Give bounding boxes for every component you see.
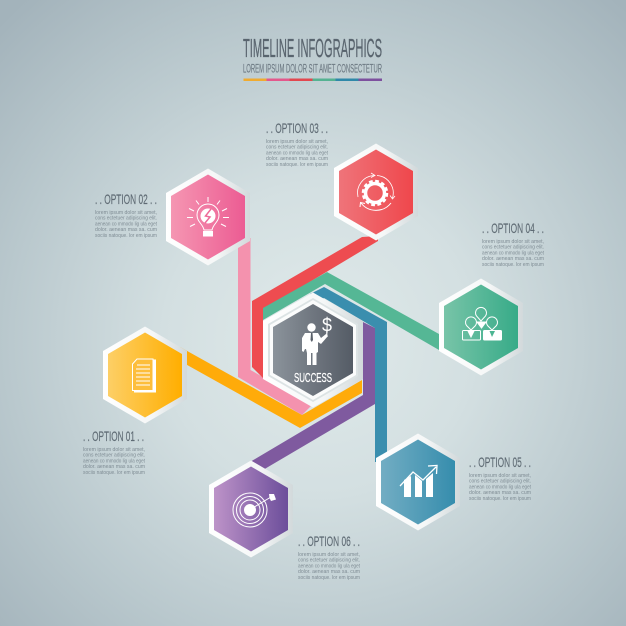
text block: option 04	[482, 220, 544, 268]
text block: option 04: cons ectetuer adipiscing elit.	[482, 245, 544, 251]
text block: option 06: aenean co mmodo lig ula eget	[298, 563, 360, 569]
text block: option 01: lorem ipsum dolor sit amet,	[83, 447, 145, 453]
text block: option 02	[95, 191, 157, 239]
text block: option 06: lorem ipsum dolor sit amet,	[298, 552, 360, 558]
text block: option 03	[266, 120, 328, 168]
text block: option 02: . . OPTION 02 . .	[95, 191, 157, 207]
icon: document	[132, 359, 156, 392]
text block: option 06: sociis natoque. lor em ipsum	[298, 575, 360, 581]
text block: option 03: lorem ipsum dolor sit amet,	[266, 139, 328, 145]
text block: option 05: . . OPTION 05 . .	[469, 454, 531, 470]
icon: lightbulb	[187, 197, 229, 236]
text block: option 02: aenean co mmodo lig ula eget	[95, 221, 157, 227]
hexagon: option 01 document	[103, 326, 187, 424]
icon: businessman with dollar: $	[322, 316, 332, 336]
text block: option 01	[83, 428, 145, 476]
text block: option 01: sociis natoque. lor em ipsum	[83, 470, 145, 476]
hexagon: option 02 lightbulb	[166, 168, 250, 266]
ribbon: green	[263, 272, 439, 350]
text block: option 02: dolor. aenean mas sa. cum	[95, 227, 157, 233]
text block: option 02: sociis natoque. lor em ipsum	[95, 233, 157, 239]
text block: option 04: lorem ipsum dolor sit amet,	[482, 239, 544, 245]
icon: growth chart	[400, 466, 437, 497]
text block: option 01: dolor. aenean mas sa. cum	[83, 464, 145, 470]
text block: option 03: aenean co mmodo lig ula eget	[266, 150, 328, 156]
text block: option 06	[298, 533, 360, 581]
text block: option 04: sociis natoque. lor em ipsum	[482, 262, 544, 268]
rainbow rule	[244, 78, 382, 81]
text block: option 05: sociis natoque. lor em ipsum	[469, 496, 531, 502]
ribbon: red	[252, 236, 378, 378]
icon: target and arrow	[233, 493, 276, 527]
hexagon: option 04 team	[439, 278, 523, 376]
text block: option 06: cons ectetuer adipiscing elit.	[298, 558, 360, 564]
text block: option 02: cons ectetuer adipiscing elit.	[95, 216, 157, 222]
hexagon: option 06 target	[209, 460, 293, 558]
text block: option 01: . . OPTION 01 . .	[83, 428, 144, 444]
text block: option 03: sociis natoque. lor em ipsum	[266, 162, 328, 168]
text block: option 04: dolor. aenean mas sa. cum	[482, 256, 544, 262]
text block: option 05	[469, 454, 531, 502]
text block: option 06: dolor. aenean mas sa. cum	[298, 569, 360, 575]
text block: option 01: aenean co mmodo lig ula eget	[83, 458, 145, 464]
hexagon: option 05 chart	[376, 434, 460, 530]
hexagon: option 03 gear	[334, 144, 418, 240]
text block: option 03: cons ectetuer adipiscing elit.	[266, 145, 328, 151]
text block: option 01: cons ectetuer adipiscing elit.	[83, 453, 145, 459]
text block: option 03: . . OPTION 03 . .	[266, 120, 328, 136]
text block: option 03: dolor. aenean mas sa. cum	[266, 156, 328, 162]
text block: option 02: lorem ipsum dolor sit amet,	[95, 210, 157, 216]
ribbon: purple	[250, 322, 375, 473]
center hexagon: success	[263, 292, 363, 408]
icon: gear with arrows	[358, 173, 395, 210]
ribbon: orange	[180, 347, 362, 428]
text block: option 05: lorem ipsum dolor sit amet,	[469, 473, 531, 479]
subtitle: LOREM IPSUM DOLOR SIT AMET CONSECTETUR	[243, 64, 382, 76]
ribbon: blue	[310, 287, 387, 462]
icon: team of three	[462, 307, 502, 340]
text block: option 05: dolor. aenean mas sa. cum	[469, 490, 531, 496]
text block: option 06: . . OPTION 06 . .	[298, 533, 360, 549]
title block	[243, 33, 382, 81]
text block: option 04: aenean co mmodo lig ula eget	[482, 250, 544, 256]
text block: option 04: . . OPTION 04 . .	[482, 220, 544, 236]
text block: option 05: cons ectetuer adipiscing elit.	[469, 479, 531, 485]
label: success: SUCCESS	[294, 370, 332, 385]
ribbon: pink	[238, 238, 312, 415]
text block: option 05: aenean co mmodo lig ula eget	[469, 484, 531, 490]
text: TIMELINE INFOGRAPHICS	[243, 33, 382, 63]
